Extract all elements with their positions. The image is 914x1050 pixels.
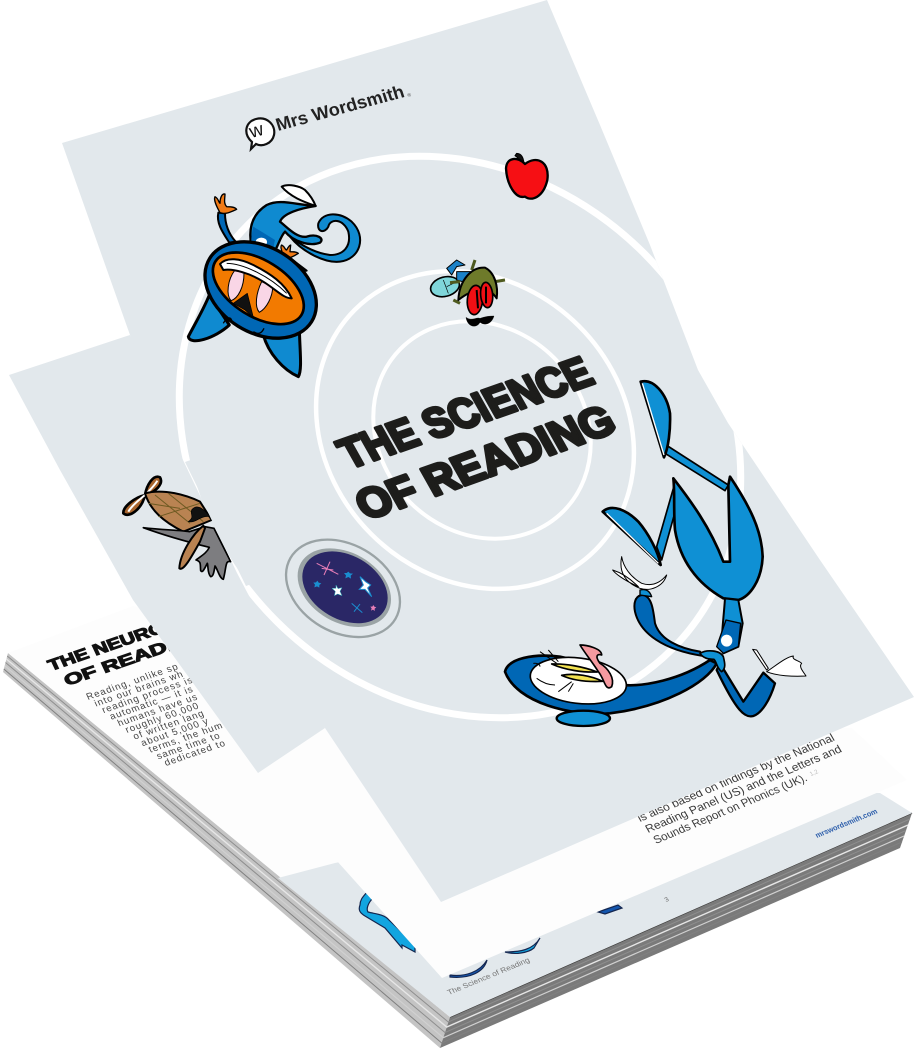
body paragraph: same time to: [155, 730, 223, 762]
second page: [9, 335, 325, 773]
website address: mrswordsmith.com: [814, 807, 879, 840]
character: upside-down long-necked blue creature: [505, 381, 806, 726]
bottom page: [8, 606, 912, 1017]
paper stack edges: [3, 653, 912, 1048]
body paragraph: roughly 60,000: [124, 701, 201, 736]
orbit rings: [176, 152, 744, 722]
page text: National Reading Panel: is also based on findings by the National: [636, 732, 837, 825]
logo: Mrs Wordsmith: ®: [406, 91, 412, 99]
icon: apple: [506, 153, 548, 199]
body paragraph: Reading, unlike sp: [85, 661, 181, 703]
character: orange-faced blue creature: [187, 185, 360, 377]
logo: Mrs Wordsmith: Mrs Wordsmith: [273, 81, 407, 135]
body paragraph: automatic — it is: [108, 684, 196, 723]
bottom page pale band: [278, 790, 912, 1017]
icon: speech bubble w: w: [246, 119, 267, 143]
icon: speech bubble w: [246, 118, 274, 149]
body paragraph: terms, the hum: [147, 720, 225, 756]
page text: National Reading Panel: Sounds Report on Phonics (UK).: [652, 772, 810, 847]
heading: neuroscience of reading: OF READI: [62, 637, 176, 690]
body paragraph: reading process is: [100, 675, 195, 716]
page number: 3: [664, 896, 671, 904]
title: THE SCIENCE OF READING: OF READING: [347, 397, 624, 529]
middle white page: [258, 728, 907, 978]
body paragraph: about 5,000 y: [139, 716, 211, 749]
logo: Mrs Wordsmith: [246, 81, 412, 149]
character: small fly: [428, 260, 505, 326]
body paragraph: humans have us: [116, 692, 200, 729]
airship character: [123, 477, 231, 579]
body paragraph: dedicated to: [163, 738, 228, 769]
body paragraph: [85, 661, 228, 769]
partial character on bottom page: [359, 892, 622, 977]
portal: starry oval: [268, 520, 418, 657]
page text: National Reading Panel: Reading Panel (US) and the Letters and: [644, 744, 844, 836]
title: THE SCIENCE OF READING: THE SCIENCE: [330, 349, 601, 478]
title: THE SCIENCE OF READING: [330, 349, 624, 529]
body paragraph: of written lang: [131, 708, 207, 742]
ring gap cover: [185, 455, 262, 586]
page text: National Reading Panel: 1,2: [809, 769, 820, 778]
heading: neuroscience of reading: [46, 620, 176, 690]
footer: The Science of Reading: The Science of Reading: [446, 955, 531, 997]
body paragraph: into our brains wh: [93, 669, 186, 709]
heading: neuroscience of reading: THE NEURO: [46, 620, 168, 675]
